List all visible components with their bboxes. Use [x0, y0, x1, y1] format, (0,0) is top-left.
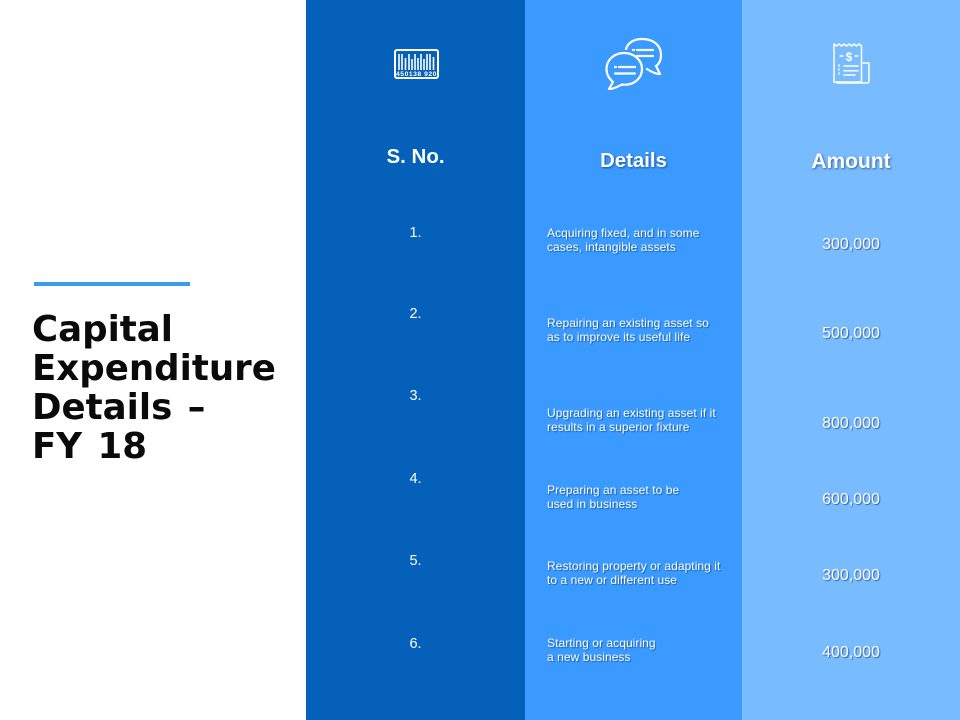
detail 6 — [547, 636, 656, 664]
detail 4 — [547, 483, 680, 511]
detail 1 — [547, 226, 700, 255]
number 4: 4. — [409, 471, 422, 487]
detail 6: Starting or acquiring — [547, 636, 656, 650]
amount 6: 400,000 — [822, 644, 880, 661]
panel: details — [525, 0, 742, 720]
detail 3: Upgrading an existing asset if it — [547, 406, 716, 420]
icon: receipt — [833, 43, 870, 84]
icon: chat bubbles — [605, 38, 662, 90]
detail 4: used in business — [547, 497, 637, 511]
title — [32, 308, 276, 466]
detail 5 — [547, 559, 722, 587]
number 6: 6. — [409, 636, 422, 652]
amount 5: 300,000 — [822, 567, 880, 584]
detail 2: Repairing an existing asset so — [547, 316, 709, 330]
detail 1: cases, intangible assets — [547, 240, 676, 254]
heading: S. No.: S. No. — [386, 145, 445, 168]
detail 4: Preparing an asset to be — [547, 483, 679, 497]
heading: Details: Details — [600, 150, 667, 172]
accent line — [34, 282, 190, 286]
detail 6: a new business — [547, 650, 631, 664]
detail 5: to a new or different use — [547, 573, 677, 587]
amount 4: 600,000 — [822, 491, 880, 508]
number 2: 2. — [409, 306, 422, 322]
panel: serial numbers — [306, 0, 525, 720]
panel: amount — [742, 0, 960, 720]
detail 3 — [547, 406, 717, 435]
detail 1: Acquiring fixed, and in some — [547, 226, 699, 240]
title: FY 18 — [32, 426, 147, 466]
icon: barcode: 450138 920 — [396, 71, 437, 78]
heading: Amount: Amount — [811, 150, 891, 173]
detail 2: as to improve its useful life — [547, 330, 690, 344]
number 3: 3. — [409, 388, 422, 404]
detail 2 — [547, 316, 710, 345]
amount 1: 300,000 — [822, 236, 880, 253]
icon: receipt: $ — [846, 50, 853, 64]
title: Expenditure — [32, 348, 276, 388]
number 1: 1. — [409, 225, 422, 241]
detail 3: results in a superior fixture — [547, 420, 689, 434]
number 5: 5. — [409, 553, 422, 569]
amount 2: 500,000 — [822, 325, 880, 342]
title: Capital — [32, 308, 173, 350]
title: Details – — [32, 386, 205, 428]
detail 5: Restoring property or adapting it — [547, 559, 720, 573]
amount 3: 800,000 — [822, 415, 880, 432]
icon: barcode — [394, 49, 439, 79]
